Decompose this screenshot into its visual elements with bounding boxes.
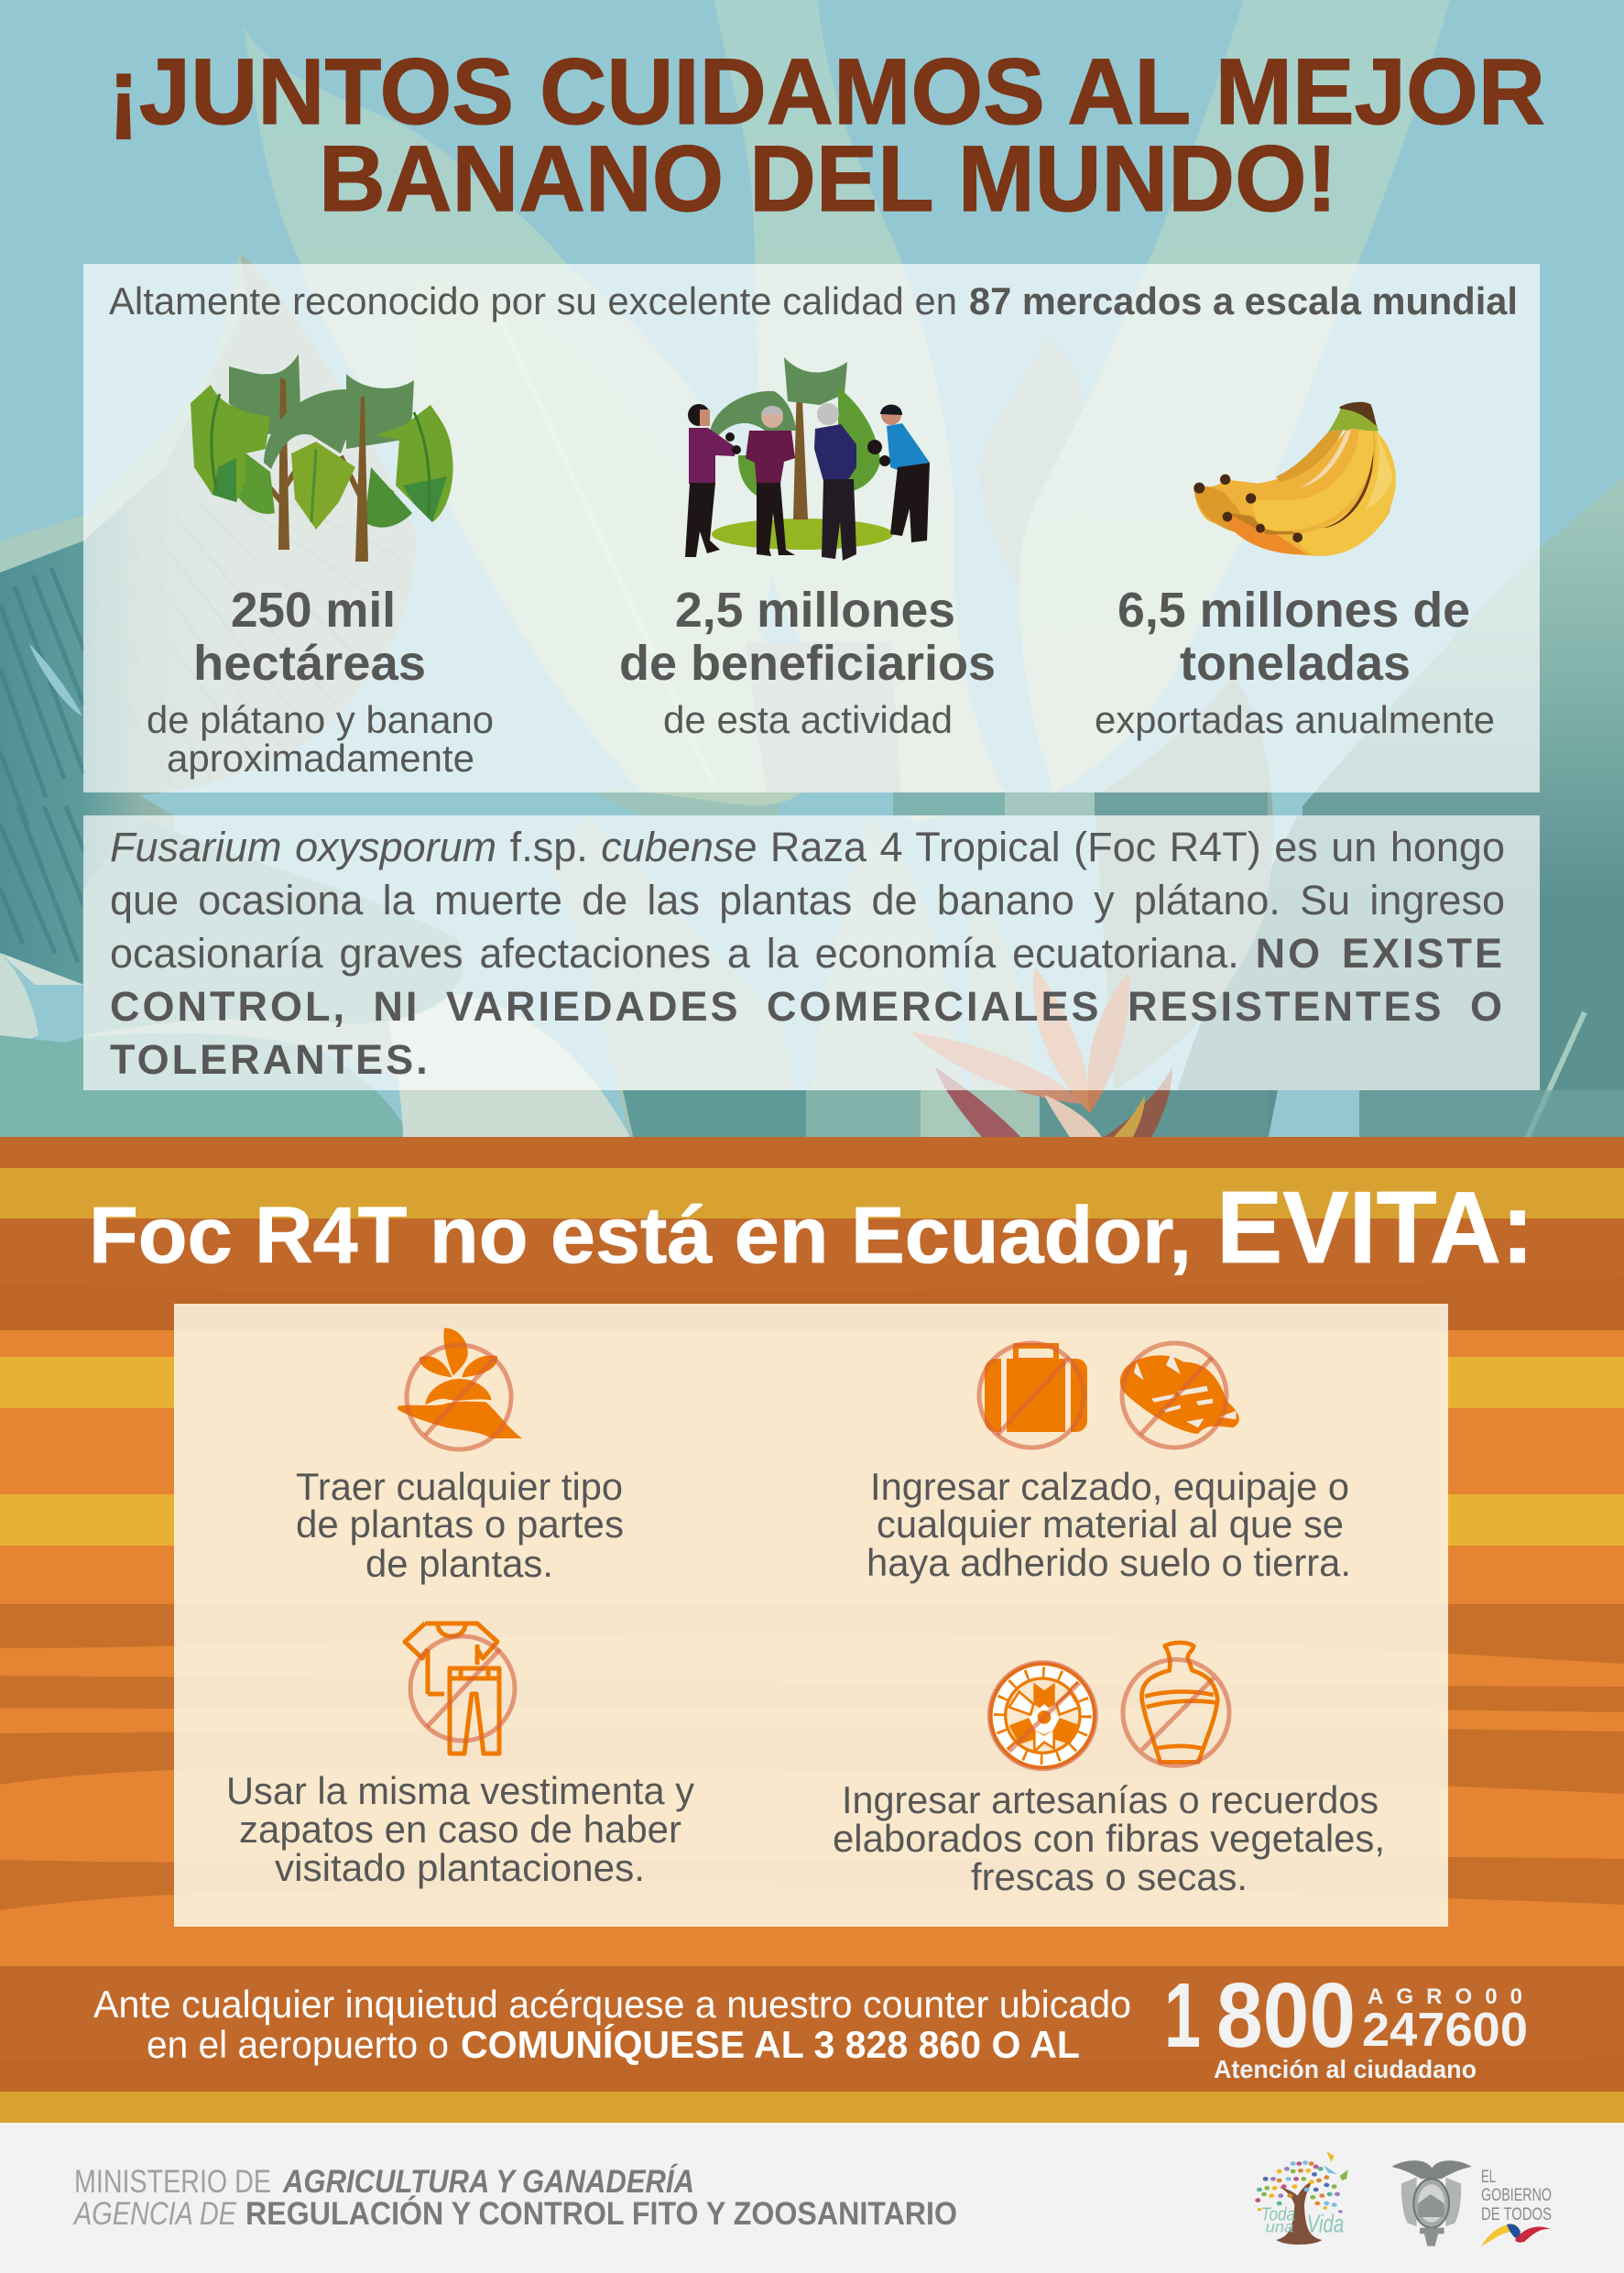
paragraph: Fusarium oxysporum f.sp. cubense Raza 4 Tropical (Foc R4T) es un hongo [110,824,1505,870]
paragraph: TOLERANTES. [110,1036,431,1083]
logo: Toda una Vida [1255,2151,1348,2245]
logo: El Gobierno de Todos [1481,2168,1552,2246]
background: tropical leaves [0,0,1624,1141]
paragraph [110,821,1505,1088]
intro sentence [109,279,1518,322]
figure: 2,5 millones de beneficiarios [619,583,996,741]
text: no shoes or luggage [866,1465,1351,1584]
contact text [93,1983,1131,2066]
heading: Foc R4T no está en Ecuador, EVITA: Foc R4T no está en Ecuador, [89,1191,1192,1280]
figure: 6,5 millones de toneladas: 6,5 millones de [1117,583,1470,638]
phone number: 800 [1216,1964,1356,2067]
icon: no crafts vase [1123,1643,1229,1765]
paragraph: que ocasiona la muerte de las plantas de banano y plátano. Su ingreso [110,877,1505,923]
logo: national coat of arms [1391,2160,1472,2246]
contact text: Ante cualquier inquietud acérquese a nuestro counter ubicado [93,1983,1131,2026]
text: no plants [296,1465,624,1585]
figure: 250 mil hectáreas: hectáreas [193,636,426,691]
text: no shoes or luggage: cualquier material al que se [877,1503,1344,1546]
phone number: 1 [1164,1964,1201,2067]
phone number [1164,1964,1528,2083]
icon: no luggage [979,1343,1087,1448]
icon: no clothing [405,1623,515,1754]
logo: Toda una Vida: Vida [1307,2210,1344,2238]
figure: 6,5 millones de toneladas [1095,583,1495,741]
text: no clothing: Usar la misma vestimenta y [226,1769,694,1812]
paragraph: CONTROL, NI VARIEDADES COMERCIALES RESISTENTES O [110,983,1505,1030]
text: no crafts: elaborados con fibras vegetales, [833,1817,1385,1860]
footer [0,2123,1624,2273]
figure: 250 mil hectáreas: 250 mil [231,583,396,638]
logo: El Gobierno de Todos: EL [1481,2168,1496,2187]
icon: no shoes [1120,1343,1239,1448]
paragraph: ocasionaría graves afectaciones a la economía ecuatoriana. NO EXISTE [110,930,1505,977]
title: BANANO DEL MUNDO! [319,126,1337,231]
figure: 250 mil hectáreas: de plátano y banano [147,698,494,741]
intro sentence: 87 mercados a escala mundial [969,279,1518,322]
figure: 2,5 millones de beneficiarios: 2,5 millones [675,583,955,638]
heading: Foc R4T no está en Ecuador, EVITA [89,1171,1534,1284]
flower: heliconia [910,967,1172,1141]
text: no shoes or luggage: haya adherido suelo o tierra. [866,1541,1351,1584]
logo: Toda una Vida: Toda [1261,2204,1295,2224]
contact text: COMUNÍQUESE AL 3 828 860 O AL [461,2023,1080,2066]
logo: Toda una Vida: una [1266,2218,1294,2236]
institutions: AGRICULTURA Y GANADERÍA [282,2164,694,2200]
institutions [72,2164,957,2232]
contact band [0,1964,1624,2123]
figure: 2,5 millones de beneficiarios: de beneficiarios [619,636,996,691]
figure: 6,5 millones de toneladas: toneladas [1180,636,1411,691]
title [108,39,1545,231]
figure: 250 mil hectáreas [147,583,494,780]
icon: no crafts plate [989,1663,1095,1769]
heading: Foc R4T no está en Ecuador, EVITA: EVITA: [1216,1171,1534,1284]
icon: bananas [1193,402,1396,556]
text: no plants: Traer cualquier tipo [296,1465,623,1508]
text: no clothing [226,1769,694,1889]
panel: disease description [83,815,1540,1090]
institutions: MINISTERIO DE [74,2164,271,2200]
icon: no plants [398,1328,522,1449]
icon: banana plants [191,354,453,562]
panel: what to avoid [174,1304,1448,1927]
phone number: 247600 [1362,2004,1528,2057]
phone number: Atención al ciudadano [1214,2055,1477,2083]
text: no crafts: frescas o secas. [971,1855,1248,1898]
logo: El Gobierno de Todos: GOBIERNO [1481,2186,1552,2205]
background: orange stripes [0,1137,1624,2123]
text: no clothing: zapatos en caso de haber [239,1808,681,1851]
title: ¡JUNTOS CUIDAMOS AL MEJOR [108,39,1545,144]
intro sentence: Altamente reconocido por su excelente calidad en [109,279,957,322]
logo: El Gobierno de Todos: DE TODOS [1481,2205,1552,2224]
figure: 250 mil hectáreas: aproximadamente [167,737,474,780]
text: no plants: de plantas o partes [296,1503,624,1546]
figure: 6,5 millones de toneladas: exportadas anualmente [1095,698,1495,741]
phone number: AGRO00 [1368,1984,1522,2009]
text: no crafts: Ingresar artesanías o recuerdos [842,1778,1379,1821]
text: no shoes or luggage: Ingresar calzado, equipaje o [870,1465,1349,1508]
institutions: REGULACIÓN Y CONTROL FITO Y ZOOSANITARIO [245,2195,957,2232]
text: no plants: de plantas. [365,1542,553,1585]
figure: 2,5 millones de beneficiarios: de esta actividad [663,698,953,741]
text: no clothing: visitado plantaciones. [275,1846,645,1889]
panel: key figures [83,264,1540,792]
institutions: AGENCIA DE [72,2196,237,2232]
contact text: en el aeropuerto o [147,2023,449,2066]
icon: people around a plant [685,357,930,561]
text: no crafts [833,1778,1385,1898]
